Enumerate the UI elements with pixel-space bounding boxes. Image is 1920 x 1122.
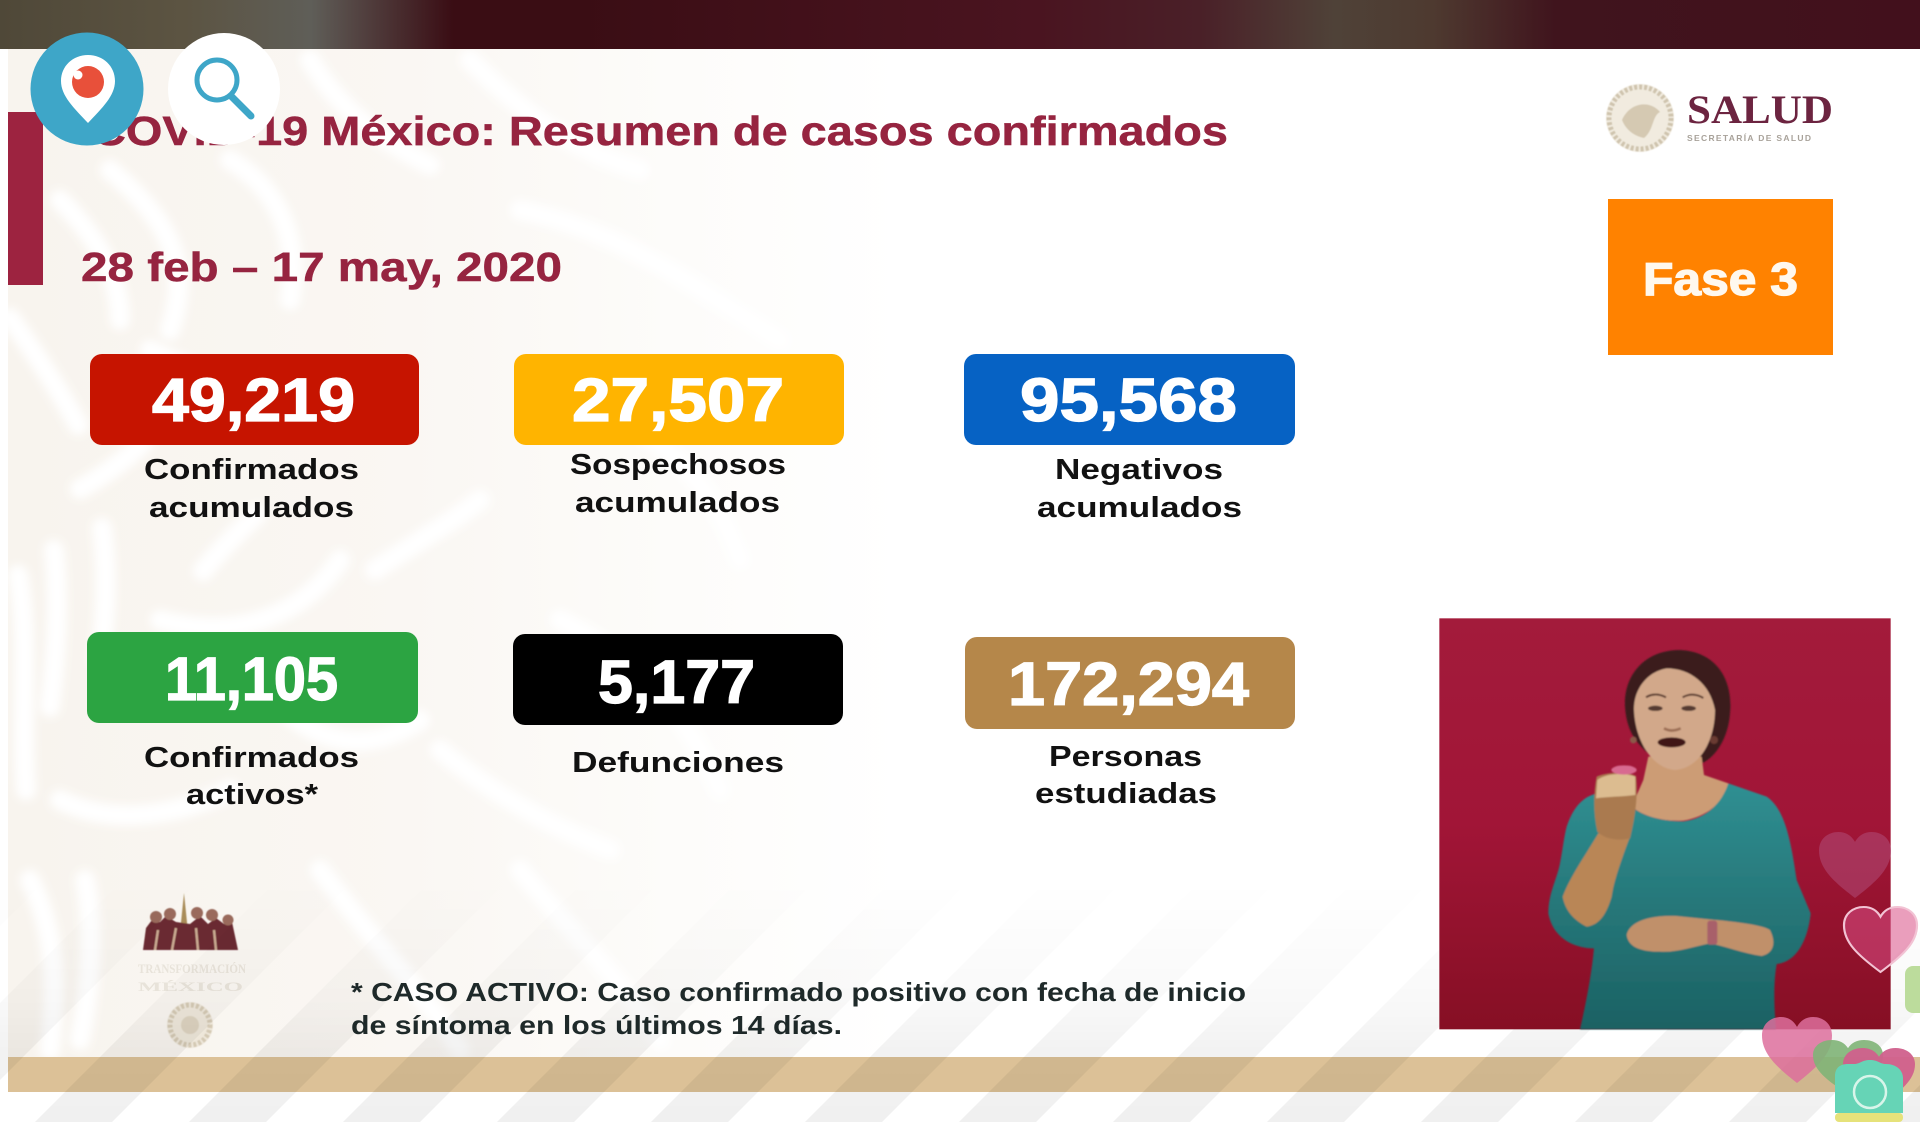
eyes and brows [1646,694,1703,698]
stat: negativos acumulados: 95,568 [1020,366,1237,434]
bottom tan band [8,1057,1920,1092]
icon: green heart [1813,1040,1883,1094]
face [1634,668,1715,770]
stat: confirmados acumulados: acumulados [149,492,354,524]
logo: Salud [1606,84,1833,152]
neck and chest [1632,757,1728,821]
stat: confirmados activos: 11,105 [165,645,338,713]
stat: confirmados activos: Confirmados [144,742,359,774]
stat: confirmados activos [87,632,418,811]
lower forearm and hand [1627,916,1773,956]
blouse [1548,783,1811,1029]
stat: defunciones: Defunciones [572,747,784,779]
footnote [351,977,1246,1040]
lips [1658,737,1686,747]
footnote: de síntoma en los últimos 14 días. [351,1010,842,1040]
stat: negativos acumulados: Negativos [1055,454,1223,486]
bracelet [1707,921,1717,945]
fingertip marker [1611,765,1637,775]
raised hand [1594,773,1637,840]
icon: periscope button [30,32,144,146]
wordmark subtitle: SECRETARÍA DE SALUD [1687,133,1811,143]
icon: rose heart [1843,1048,1915,1106]
wordmark: SALUD [1687,87,1833,132]
stat: sospechosos acumulados: 27,507 [572,366,784,434]
icon: pink heart [1844,907,1917,972]
stat: negativos acumulados [964,354,1295,524]
top video strip [0,0,1920,49]
icon: faded heart [1819,832,1891,898]
stat: sospechosos acumulados: Sospechosos [570,449,786,481]
icon: national seal [1606,84,1674,152]
stat: confirmados acumulados: Confirmados [144,454,359,486]
icon: historic figures [143,893,238,950]
stat: defunciones [513,634,843,779]
footnote: * CASO ACTIVO: Caso confirmado positivo con fecha de inicio [351,977,1246,1007]
background ornamental pattern [8,49,908,1057]
phase badge [1608,199,1833,355]
stat: personas estudiadas: Personas [1049,741,1202,773]
accent bar [8,112,43,285]
hair [1625,650,1730,763]
interpreter figure [1548,650,1811,1029]
raised forearm [1563,833,1630,927]
logo: transformación [138,893,247,1048]
stat: confirmados acumulados: 49,219 [152,366,355,434]
stat: personas estudiadas: estudiadas [1035,778,1217,810]
stat: confirmados acumulados [90,354,419,524]
phase badge: Fase 3 [1643,253,1798,305]
icon: small seal [167,1002,213,1048]
panel: sign-language interpreter [1439,618,1891,1029]
diagonal stripes [0,1018,1920,1122]
icon: green pill [1905,966,1920,1013]
fingers [1596,774,1635,798]
icon: search button [168,33,280,145]
panel background [1439,618,1891,1029]
icon: large pink heart [1762,1017,1832,1083]
stat: defunciones: 5,177 [598,648,755,716]
logo country text: MÉXICO [138,979,243,994]
logo text: TRANSFORMACIÓN [138,961,247,976]
stat: sospechosos acumulados [514,354,844,519]
nose [1664,728,1681,730]
stat: confirmados activos: activos* [186,779,319,811]
stat: personas estudiadas [965,637,1295,810]
stat: sospechosos acumulados: acumulados [575,487,780,519]
stat: negativos acumulados: acumulados [1037,492,1242,524]
icon: camera button [1835,1060,1903,1122]
date range: 28 feb – 17 may, 2020 [81,244,562,290]
earrings [1630,737,1637,743]
title: COVID-19 México: Resumen de casos confirmados [92,108,1228,154]
stat: personas estudiadas: 172,294 [1008,650,1249,718]
